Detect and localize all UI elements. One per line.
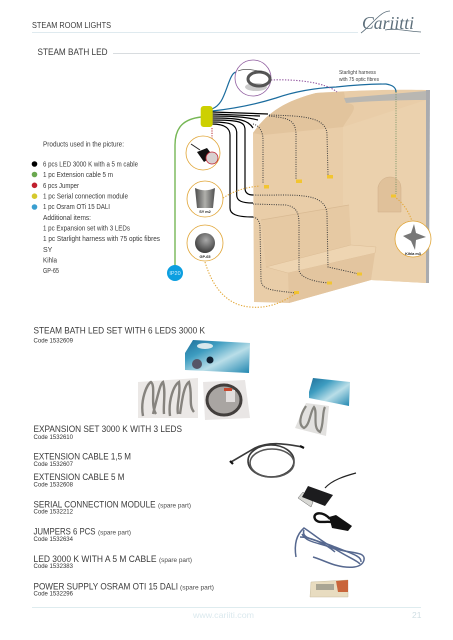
photo: serial module bbox=[298, 473, 356, 507]
green dotted fibre route bbox=[395, 92, 397, 194]
title: STEAM BATH LED SET WITH 6 LEDS 3000 K bbox=[34, 326, 205, 336]
product: LED with cable bbox=[34, 554, 192, 570]
GP-65 callout: GP-65 bbox=[200, 255, 210, 259]
photo: jumper bbox=[314, 513, 352, 531]
additional items text: Kihla bbox=[43, 258, 57, 264]
product: jumpers: Code 1532634 bbox=[34, 537, 74, 543]
product: extension cable 5 m: EXTENSION CABLE 5 M bbox=[34, 472, 124, 482]
product: power supply: (spare part) bbox=[180, 584, 214, 591]
photo: bagged cables bbox=[138, 378, 198, 418]
starlight harness callout bbox=[235, 60, 271, 96]
product: serial connection module: Code 1532212 bbox=[34, 510, 74, 516]
wall shell bbox=[253, 90, 426, 303]
product: expansion set bbox=[34, 378, 350, 441]
product: expansion set: Code 1532610 bbox=[34, 435, 74, 441]
product: steam bath LED set bbox=[34, 326, 250, 420]
photo: expansion bag bbox=[295, 403, 329, 436]
product: extension cable 5 m: Code 1532608 bbox=[34, 483, 74, 489]
logo: Cariitti: Cariitti bbox=[362, 13, 414, 33]
room corner shading bbox=[343, 100, 426, 283]
legend item: extension cable: 1 pc Extension cable 5 m bbox=[43, 172, 113, 179]
SY callout bbox=[187, 181, 223, 217]
steam room illustration bbox=[167, 60, 431, 307]
black LED cables bbox=[212, 112, 268, 217]
heading: steam room lights: STEAM ROOM LIGHTS bbox=[32, 20, 111, 30]
LED markers bbox=[264, 175, 396, 294]
additional items text: 1 pc Expansion set with 3 LEDs bbox=[43, 226, 130, 232]
blue cable bbox=[212, 84, 396, 111]
product: extension cable 1.5 m bbox=[34, 451, 131, 468]
list heading: Products used in the picture: bbox=[43, 142, 124, 148]
grey ceiling band bbox=[344, 91, 426, 103]
additional items text: SY bbox=[43, 247, 53, 254]
photo: extension cable coil bbox=[230, 444, 304, 477]
photo: LED cable coil bbox=[295, 528, 364, 567]
legend item: LED: 6 pcs LED 3000 K with a 5 m cable bbox=[43, 162, 138, 168]
additional items text: 1 pc Starlight harness with 75 optic fibres bbox=[43, 236, 160, 243]
right wall edge bbox=[425, 90, 430, 283]
starlight label: with 75 optic fibres bbox=[339, 77, 379, 83]
red jumper link bbox=[211, 128, 213, 148]
product: extension cable 1.5 m: Code 1532607 bbox=[34, 462, 74, 468]
niche bbox=[378, 177, 401, 212]
photo: LED set box bbox=[185, 340, 250, 373]
product: jumpers: JUMPERS 6 PCS bbox=[34, 527, 96, 537]
purple dotted route bbox=[271, 80, 337, 92]
photo: power supply unit bbox=[310, 580, 348, 597]
ceiling cove bbox=[253, 92, 354, 135]
photo: expansion box bbox=[309, 378, 350, 406]
footer url: www.cariiti.com bbox=[192, 610, 254, 620]
legend item: Osram: 1 pc Osram OTi 15 DALI bbox=[43, 204, 110, 211]
product: extension cable 5 m bbox=[34, 472, 124, 489]
starlight label: Starlight harness bbox=[339, 70, 376, 76]
photo: bagged LED coil bbox=[203, 380, 250, 420]
serial connection module bbox=[201, 106, 213, 127]
orange dotted routes bbox=[205, 186, 413, 307]
bench bbox=[261, 205, 376, 303]
IP20 badge bbox=[167, 265, 183, 281]
legend item: jumper: 6 pcs Jumper bbox=[43, 183, 80, 190]
code: Code 1532609 bbox=[34, 339, 74, 345]
Kihla callout: Kihla m3 bbox=[405, 252, 421, 256]
products list bbox=[32, 142, 160, 275]
product: power supply: POWER SUPPLY OSRAM OTI 15 DALI bbox=[34, 581, 178, 591]
product: extension cable 1.5 m: EXTENSION CABLE 1,5 M bbox=[34, 451, 131, 461]
starlight label bbox=[339, 70, 379, 83]
product: serial connection module bbox=[34, 499, 191, 516]
footer bbox=[32, 608, 422, 620]
jumper callout bbox=[186, 136, 220, 170]
green extension cable bbox=[175, 117, 201, 268]
product: LED with cable: (spare part) bbox=[159, 557, 192, 564]
GP-65 callout bbox=[187, 225, 223, 261]
product: expansion set: EXPANSION SET 3000 K WITH 3 LEDS bbox=[34, 424, 182, 434]
dotted LED routes bbox=[253, 115, 359, 293]
additional items text: GP-65 bbox=[43, 268, 59, 275]
product: power supply: Code 1532296 bbox=[34, 592, 74, 598]
additional items text bbox=[43, 215, 160, 275]
page number: 21 bbox=[412, 610, 422, 620]
product: serial connection module: SERIAL CONNECTION MODULE bbox=[34, 499, 156, 509]
SY callout: SY m2 bbox=[199, 210, 211, 214]
product: power supply bbox=[34, 581, 214, 598]
section heading: steam bath LED: STEAM BATH LED bbox=[38, 47, 108, 57]
legend item: serial module: 1 pc Serial connection module bbox=[43, 194, 128, 200]
product: serial connection module: (spare part) bbox=[158, 502, 191, 509]
additional items text: Additional items: bbox=[43, 215, 91, 222]
IP20 badge: IP20 bbox=[169, 271, 181, 277]
product: jumpers: (spare part) bbox=[98, 530, 131, 537]
Kihla callout bbox=[395, 221, 431, 257]
product: LED with cable: Code 1532383 bbox=[34, 564, 74, 570]
product: jumpers bbox=[34, 527, 131, 543]
product: LED with cable: LED 3000 K WITH A 5 M CABLE bbox=[34, 554, 156, 564]
